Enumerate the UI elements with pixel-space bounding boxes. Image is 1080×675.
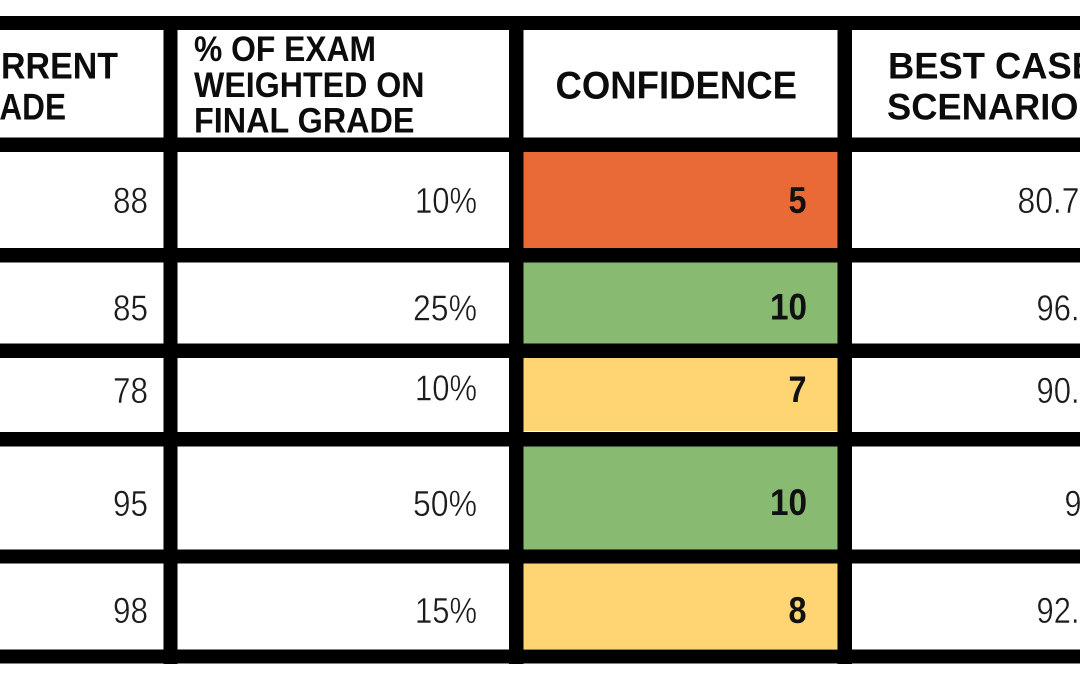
column: current grade values — [113, 180, 148, 631]
header: best case scenario: SCENARIO — [887, 86, 1078, 128]
header: percent of exam weighted on final grade: FINAL GRADE — [194, 102, 414, 140]
column: confidence scores: 8 — [788, 590, 806, 631]
column: confidence scores: 7 — [788, 369, 806, 410]
confidence cell fills — [523, 152, 838, 649]
column: exam weight values: 25% — [413, 288, 477, 328]
column: exam weight values: 10% — [415, 368, 477, 408]
column: current grade values: 88 — [113, 180, 148, 221]
column: confidence scores: 10 — [770, 482, 807, 523]
column: current grade values: 98 — [113, 590, 148, 631]
header: best case scenario — [887, 46, 1080, 128]
column: confidence scores — [770, 180, 807, 631]
column: confidence scores: 5 — [788, 180, 806, 221]
column: exam weight values: 15% — [415, 590, 477, 631]
column: exam weight values — [413, 180, 477, 631]
header: percent of exam weighted on final grade: % OF EXAM — [194, 30, 376, 69]
column: exam weight values: 50% — [413, 483, 477, 524]
header: current grade — [0, 46, 118, 128]
header: percent of exam weighted on final grade — [194, 30, 424, 140]
column: confidence scores: 10 — [770, 286, 807, 328]
column: current grade values: 95 — [113, 483, 148, 524]
column: current grade values: 85 — [113, 288, 148, 328]
header: percent of exam weighted on final grade: WEIGHTED ON — [194, 66, 424, 105]
column: exam weight values: 10% — [415, 180, 477, 221]
column: current grade values: 78 — [113, 370, 148, 411]
header: confidence: CONFIDENCE — [556, 64, 797, 108]
column: best case values, cropped at the right edge — [1018, 180, 1080, 631]
